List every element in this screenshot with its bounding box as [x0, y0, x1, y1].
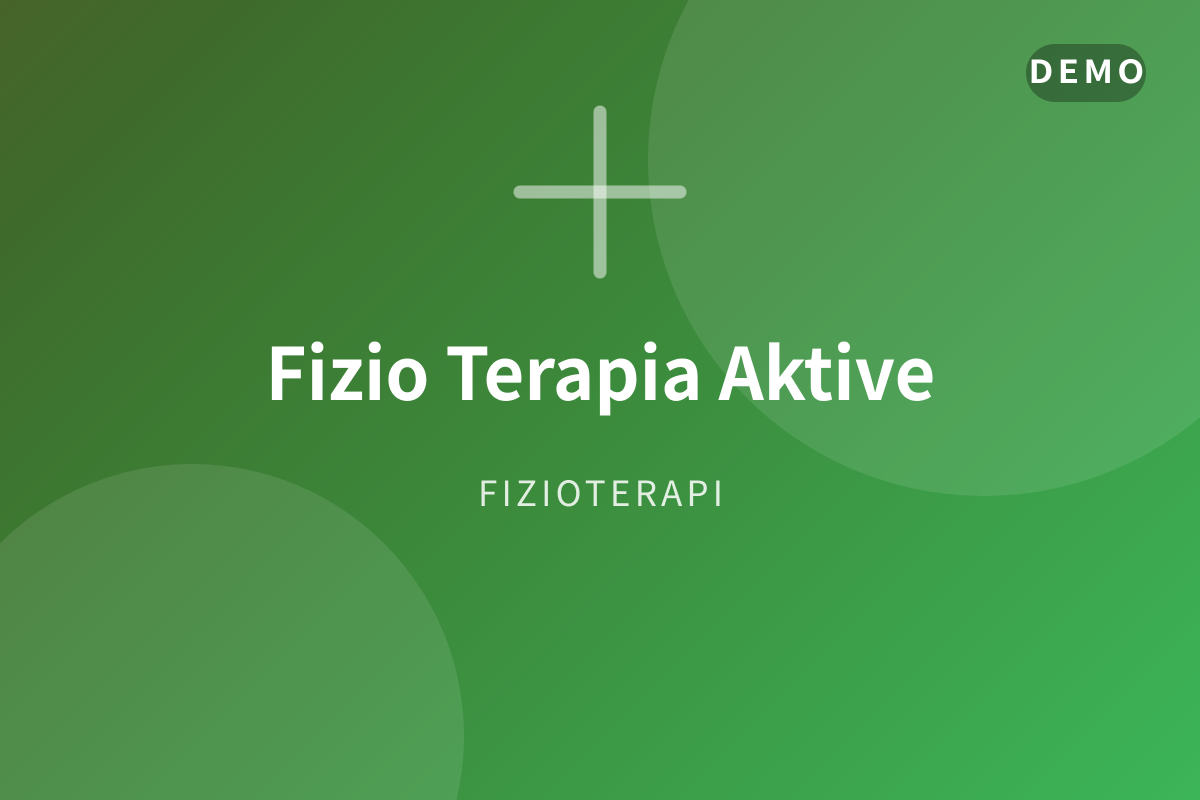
subtitle: FIZIOTERAPI	[478, 466, 723, 517]
badge: demo: DEMO	[1028, 47, 1148, 93]
circle: bottom left	[0, 464, 464, 800]
icon: cross	[514, 106, 686, 278]
circle: top right	[648, 0, 1200, 496]
title: Fizio Terapia Aktive	[266, 316, 936, 421]
